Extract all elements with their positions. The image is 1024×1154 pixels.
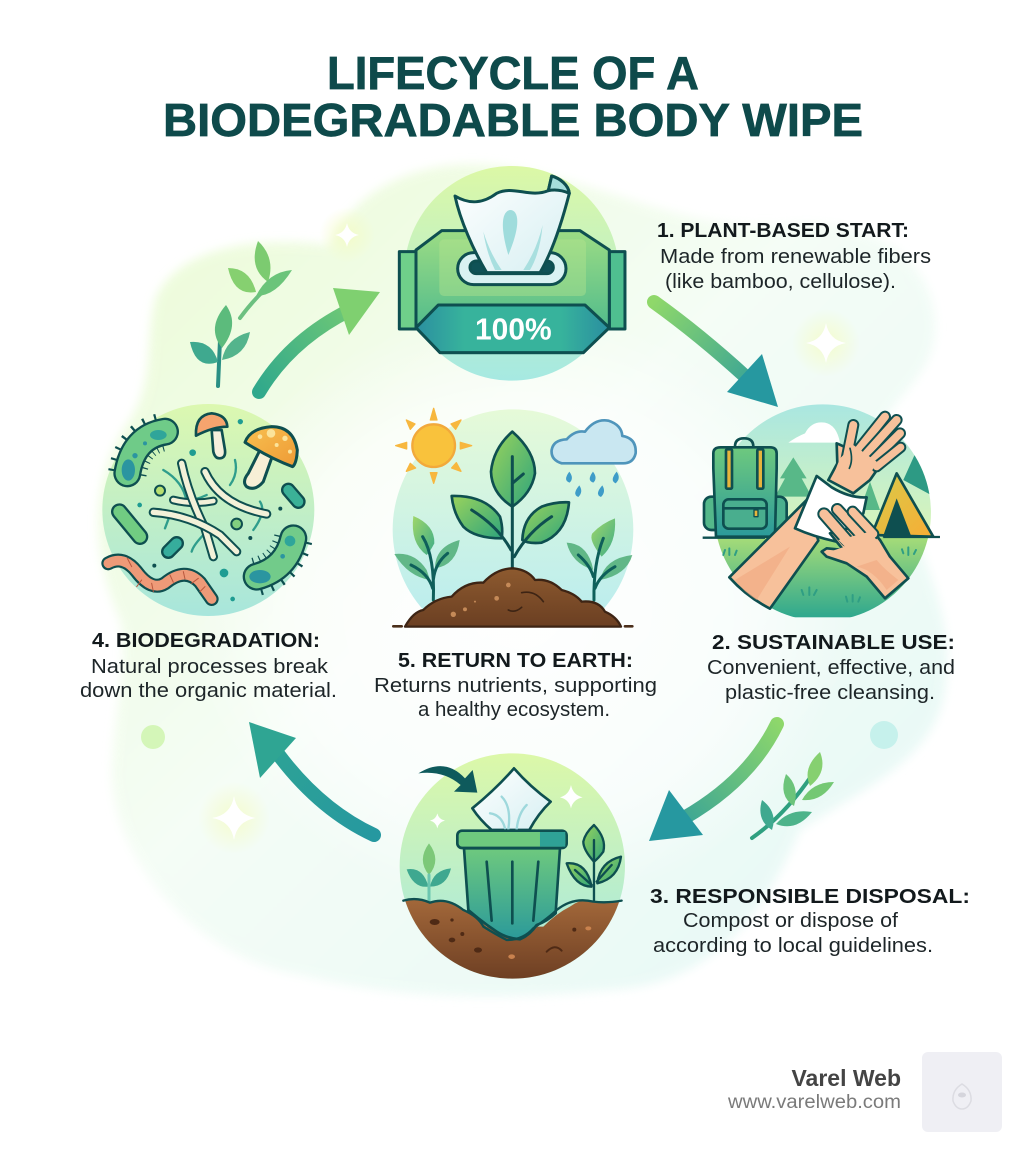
curved arrow xyxy=(418,766,477,793)
rod bacteria xyxy=(119,512,140,537)
soil mound xyxy=(393,568,632,627)
text: step 4: down the organic material. xyxy=(80,680,337,702)
text: step 5: 5. RETURN TO EARTH: xyxy=(398,650,633,672)
title: LIFECYCLE OF A xyxy=(327,47,699,99)
bacterium bottom right xyxy=(257,538,293,577)
arrow: step 4 to 1 xyxy=(259,288,380,392)
icon: seedlings with sun and rain xyxy=(393,408,636,650)
icon: bin in soil xyxy=(400,753,625,983)
left seedling xyxy=(407,843,451,902)
icon: forearm xyxy=(729,500,818,609)
worm xyxy=(108,558,212,599)
title xyxy=(163,47,863,146)
text: step 2: plastic-free cleansing. xyxy=(725,682,935,704)
text: step 5: Returns nutrients, supporting xyxy=(374,675,657,697)
right seedling xyxy=(567,825,621,902)
icon: wipe package: 100% xyxy=(475,312,552,346)
arrow: step 3 to 4 xyxy=(249,722,374,835)
title: BIODEGRADABLE BODY WIPE xyxy=(163,94,863,146)
icon: hands, backpack and tent scene xyxy=(703,400,943,617)
footer brand xyxy=(727,1065,901,1113)
footer logo xyxy=(922,1052,1002,1132)
text: step 4: 4. BIODEGRADATION: xyxy=(92,630,320,652)
text: step 3: Compost or dispose of xyxy=(683,910,898,932)
filaments xyxy=(163,460,262,552)
text: step 3: according to local guidelines. xyxy=(653,935,933,957)
wipe xyxy=(472,768,551,830)
icon: backpack xyxy=(704,438,787,537)
icon: microbes and fungi xyxy=(102,404,314,616)
icon: leaf sprigs top left xyxy=(190,241,292,386)
text: step 5 xyxy=(374,650,657,721)
text: step 2 xyxy=(707,632,955,704)
text: step 1: (like bamboo, cellulose). xyxy=(665,271,896,293)
text: step 4 xyxy=(80,630,337,702)
footer brand: www.varelweb.com xyxy=(727,1092,901,1113)
icon: lower hand xyxy=(822,509,908,598)
small dots xyxy=(137,419,243,601)
arrow: step 2 to 3 xyxy=(649,724,777,841)
soil xyxy=(403,899,622,983)
large mushroom xyxy=(245,427,297,488)
text: step 2: Convenient, effective, and xyxy=(707,657,955,679)
main plant xyxy=(452,432,569,568)
icon: wipe in hand xyxy=(795,476,867,542)
icon: leaf sprig bottom right xyxy=(752,752,834,838)
grass tufts xyxy=(723,547,916,602)
text: step 3 xyxy=(650,886,970,957)
text: step 1: 1. PLANT-BASED START: xyxy=(657,220,909,242)
arrow: step 1 to 2 xyxy=(654,302,778,407)
text: step 1: Made from renewable fibers xyxy=(660,246,931,268)
sun xyxy=(396,408,472,483)
icon: raised hand xyxy=(828,417,901,493)
decorative sparkles xyxy=(141,207,898,854)
text: step 5: a healthy ecosystem. xyxy=(418,699,610,721)
sparkles xyxy=(430,785,583,828)
text: step 2: 2. SUSTAINABLE USE: xyxy=(712,632,955,654)
footer brand: Varel Web xyxy=(791,1065,901,1091)
cloud and rain xyxy=(552,420,636,497)
text: step 1 xyxy=(657,220,931,293)
text: step 4: Natural processes break xyxy=(91,656,329,678)
bacterium top left xyxy=(127,432,165,473)
small left seedling xyxy=(394,516,460,600)
small right seedling xyxy=(567,518,632,600)
bin xyxy=(464,848,560,939)
text: step 3: 3. RESPONSIBLE DISPOSAL: xyxy=(650,886,970,908)
background blob xyxy=(98,164,947,996)
icon: wipe package xyxy=(399,166,625,381)
small mushroom xyxy=(196,413,227,458)
